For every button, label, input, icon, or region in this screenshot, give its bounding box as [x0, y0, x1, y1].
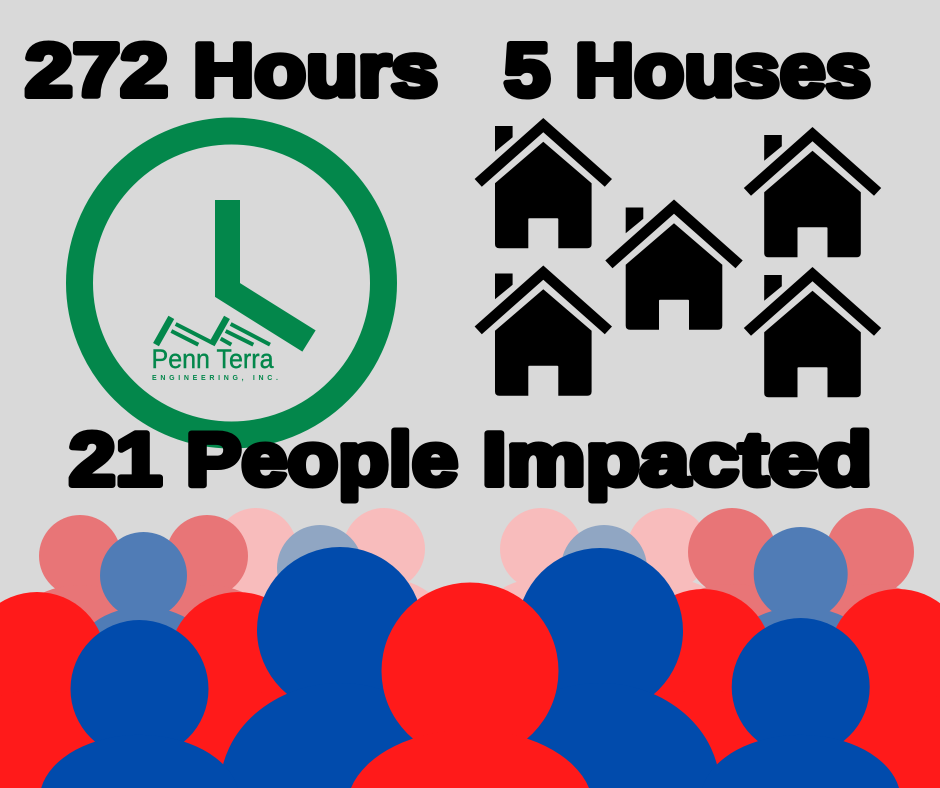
- back row: grey-blue people: [248, 525, 676, 715]
- house top left: [475, 118, 612, 248]
- house bottom right: [744, 267, 881, 397]
- icon: clock with logo: [80, 131, 384, 435]
- middle row: salmon people: [8, 508, 940, 696]
- house bottom left: [475, 266, 612, 396]
- heading: 272 Hours: Hours: [193, 28, 438, 112]
- heading: 21 People Impacted: Impacted: [482, 417, 872, 501]
- heading: 272 Hours: [25, 28, 438, 112]
- house top right: [744, 127, 881, 257]
- house centre: [605, 200, 743, 330]
- heading: 5 Houses: 5: [504, 28, 550, 112]
- crowd of people: [0, 508, 940, 788]
- clock ring: [80, 131, 384, 435]
- heading: 21 People Impacted: [69, 417, 872, 501]
- logo tagline: ENGINEERING, INC.: [152, 375, 278, 382]
- large blue people: [220, 547, 720, 788]
- logo mark: [156, 317, 270, 345]
- logo name: Penn Terra: [152, 344, 274, 374]
- clock hands: [228, 200, 309, 341]
- red people: [0, 589, 940, 788]
- icon: five houses: [475, 118, 881, 397]
- heading: 272 Hours: 272: [25, 28, 168, 112]
- heading: 21 People Impacted: 21: [69, 417, 162, 501]
- front blue people: [41, 618, 899, 788]
- heading: 21 People Impacted: People: [186, 417, 458, 501]
- heading: 5 Houses: Houses: [575, 28, 871, 112]
- logo: PennTerra Engineering: [152, 317, 278, 382]
- back row: pale pink people: [186, 508, 738, 702]
- middle row: medium blue people: [74, 527, 879, 723]
- large red person: [351, 582, 589, 788]
